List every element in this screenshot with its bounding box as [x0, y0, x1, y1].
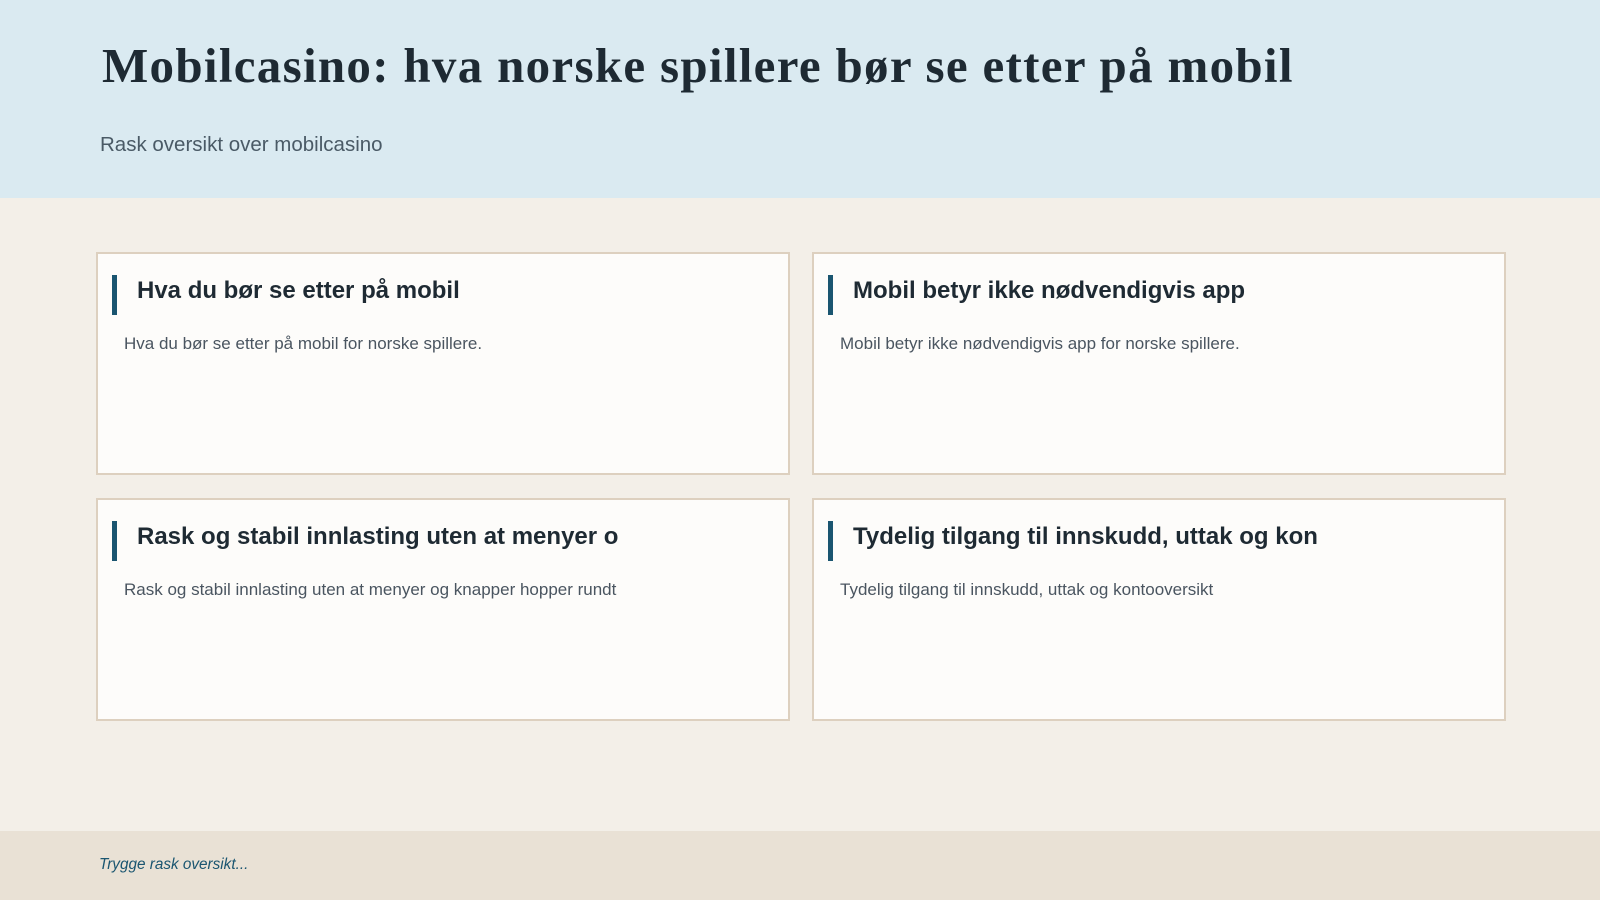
- panel heading: Rask og stabil innlasting uten at menyer o: [137, 523, 618, 550]
- panel heading: Mobil betyr ikke nødvendigvis app: [853, 277, 1245, 304]
- panel text: Rask og stabil innlasting uten at menyer og knapper hopper rundt: [124, 580, 616, 599]
- accent bar: [828, 275, 833, 315]
- panel heading: Tydelig tilgang til innskudd, uttak og kon: [853, 523, 1318, 550]
- accent bar: [112, 521, 117, 561]
- title: Mobilcasino: hva norske spillere bør se etter på mobil: [102, 38, 1294, 93]
- panel text: Mobil betyr ikke nødvendigvis app for norske spillere.: [840, 334, 1240, 353]
- panel: tydelig tilgang: [812, 498, 1506, 721]
- panel heading: Hva du bør se etter på mobil: [137, 277, 460, 304]
- footer: [0, 831, 1600, 900]
- panel: rask og stabil innlasting: [96, 498, 790, 721]
- panel text: Hva du bør se etter på mobil for norske spillere.: [124, 334, 482, 353]
- accent bar: [828, 521, 833, 561]
- panel: hva du bør se etter: [96, 252, 790, 475]
- subtitle: Rask oversikt over mobilcasino: [100, 133, 383, 156]
- footer text: Trygge rask oversikt...: [99, 856, 248, 873]
- panel text: Tydelig tilgang til innskudd, uttak og kontooversikt: [840, 580, 1213, 599]
- panel: mobil betyr ikke app: [812, 252, 1506, 475]
- header: [0, 0, 1600, 198]
- accent bar: [112, 275, 117, 315]
